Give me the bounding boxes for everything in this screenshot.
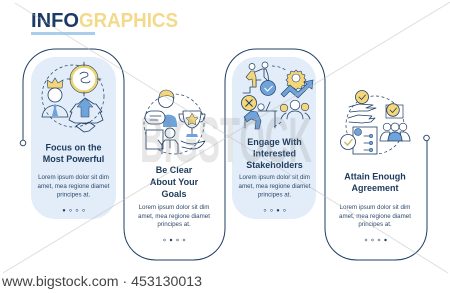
heading: card 2: Be Clear bbox=[156, 165, 193, 175]
text: card 2 body: principes at. bbox=[157, 221, 191, 228]
text: card 3 body: Lorem ipsum dolor sit dim bbox=[239, 174, 310, 181]
pager: card 3 bbox=[264, 209, 286, 211]
text: card 2 body: Lorem ipsum dolor sit dim bbox=[139, 204, 209, 211]
heading: card 2: About Your bbox=[150, 177, 199, 187]
icon: focus on the most powerful bbox=[42, 62, 104, 132]
text: card 1 body: Lorem ipsum dolor sit dim bbox=[38, 174, 109, 181]
heading: card 4: Attain Enough bbox=[344, 172, 406, 182]
heading: card 3: Engage With bbox=[247, 137, 302, 147]
pager: card 2 bbox=[164, 239, 185, 241]
icon: attain enough agreement bbox=[340, 90, 410, 154]
text: card 1 body: principes at. bbox=[57, 192, 90, 198]
pager: card 4 bbox=[365, 239, 386, 241]
text: card 4 body: Lorem ipsum dolor sit dim bbox=[340, 204, 410, 211]
text: card 3 body: principes at. bbox=[258, 192, 291, 198]
heading: card 3: Interested bbox=[253, 148, 296, 158]
heading: card 1: Focus on the bbox=[46, 142, 102, 152]
start node bbox=[20, 140, 26, 146]
heading: card 1: Most Powerful bbox=[43, 154, 104, 164]
watermark url: www.bigstock.com · 453130013 bbox=[1, 274, 202, 289]
title: INFO bbox=[31, 9, 79, 32]
text: card 1 body: amet, mea regione diamet bbox=[38, 183, 110, 190]
panel: fill card 3 bbox=[232, 57, 316, 219]
text: card 2 body: amet, mea regione diamet bbox=[138, 213, 210, 220]
title: GRAPHICS bbox=[79, 9, 178, 32]
heading: card 2: Goals bbox=[161, 189, 187, 199]
icon: engage with stakeholders bbox=[242, 62, 313, 129]
title underline bbox=[31, 32, 95, 35]
heading: card 3: Stakeholders bbox=[246, 160, 303, 170]
connecting snake outline bbox=[23, 49, 427, 260]
pager: card 1 bbox=[63, 209, 84, 211]
icon: be clear about your goals bbox=[144, 90, 205, 154]
end node bbox=[424, 135, 429, 141]
title bbox=[31, 9, 178, 32]
text: card 4 body: amet, mea regione diamet bbox=[339, 213, 411, 220]
heading: card 4: Agreement bbox=[351, 183, 399, 193]
text: card 3 body: amet, mea regione diamet bbox=[239, 183, 311, 190]
panel: fill card 1 bbox=[31, 57, 116, 219]
text: card 4 body: principes at. bbox=[358, 221, 392, 228]
